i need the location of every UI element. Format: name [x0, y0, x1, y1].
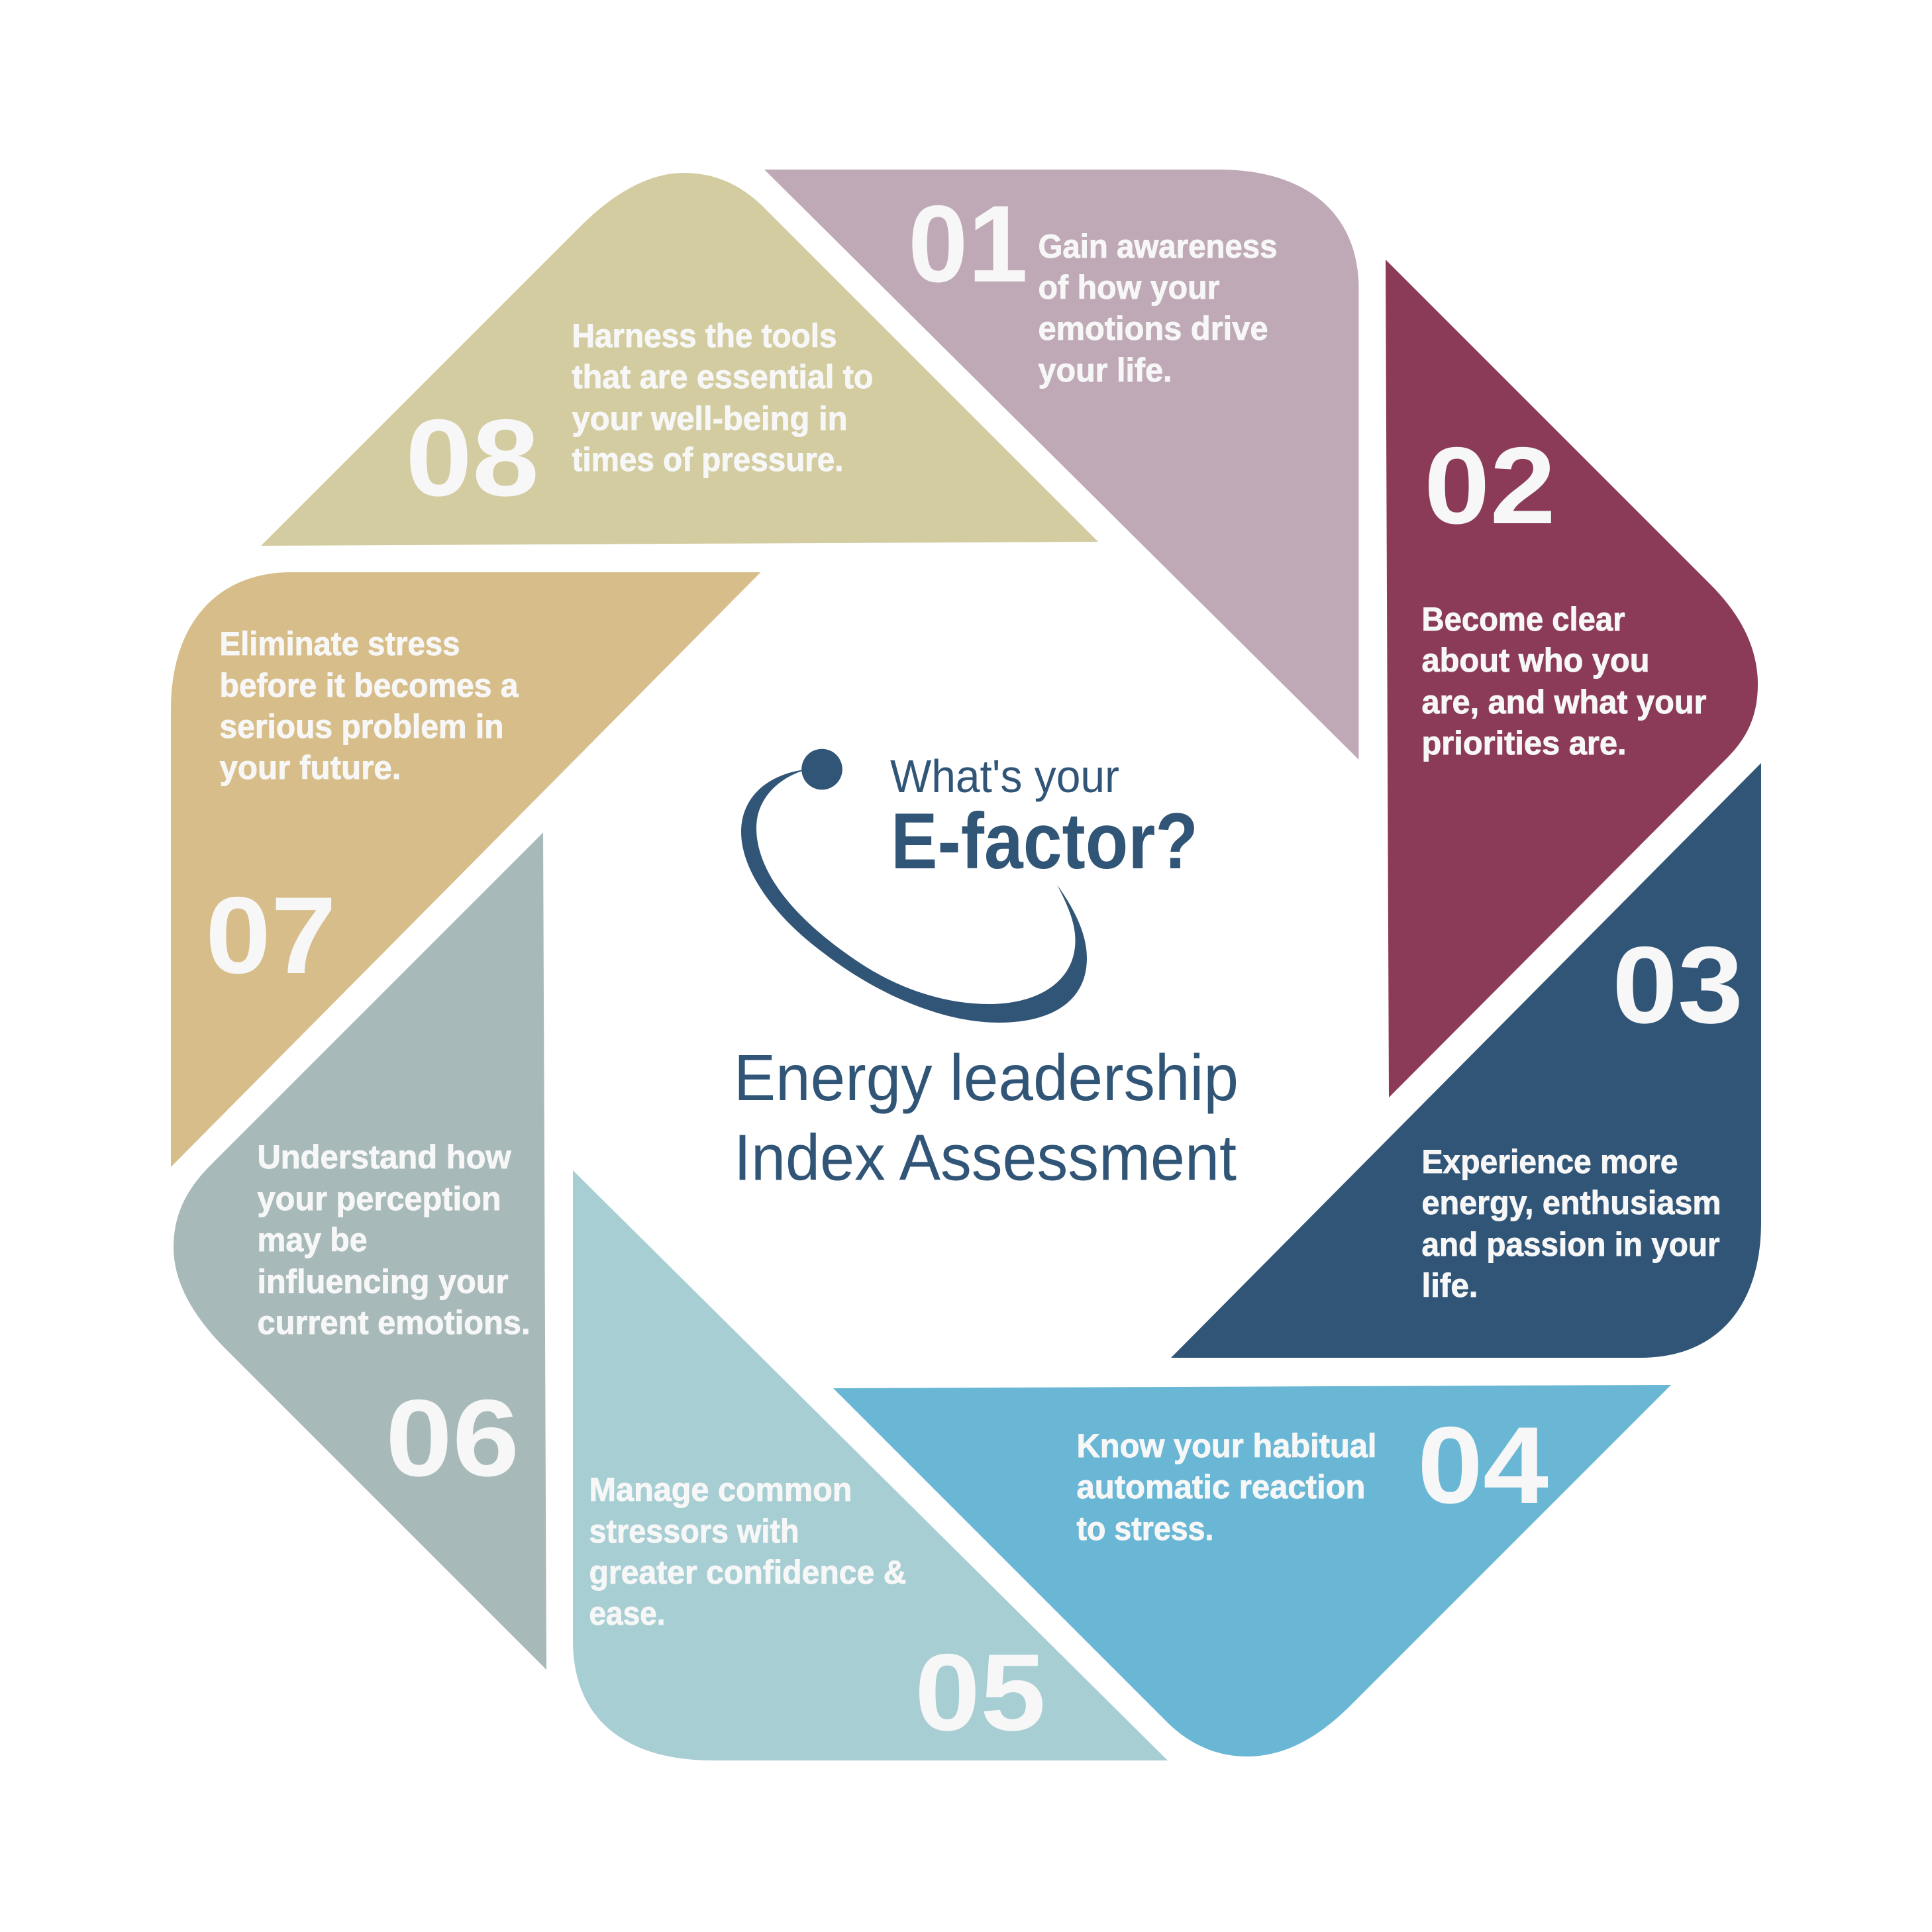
panel 02 text: Become clear — [1421, 601, 1625, 638]
number 08: 08 — [405, 397, 539, 519]
panel 04 shape — [833, 1385, 1671, 1756]
panel 02 text: priorities are. — [1421, 725, 1627, 762]
logo orbit swoosh — [741, 770, 1087, 1023]
number 07: 07 — [205, 874, 336, 996]
panel 08 text: Harness the tools — [572, 317, 837, 354]
panel 05 shape — [573, 1170, 1168, 1760]
panel 05 text — [589, 1471, 906, 1632]
panel 06 text: Understand how — [257, 1139, 511, 1176]
panel 03 text: energy, enthusiasm — [1421, 1184, 1721, 1221]
panel 04 text — [1077, 1427, 1376, 1547]
panel 05 text: stressors with — [589, 1513, 799, 1550]
panel 08 text — [572, 317, 873, 478]
panel 06 text: may be — [257, 1221, 367, 1258]
logo text: E-factor?: E-factor? — [891, 797, 1198, 886]
center title — [734, 1041, 1239, 1194]
panel 07 text: your future. — [220, 749, 401, 786]
panel 07 shape — [171, 572, 760, 1167]
panel 07 text: before it becomes a — [220, 667, 519, 704]
panel 01: emotional awareness — [764, 170, 1359, 760]
panel 04 text: Know your habitual — [1077, 1427, 1376, 1464]
center title: Index Assessment — [734, 1121, 1237, 1194]
panel 04: automatic reaction to stress — [833, 1385, 1671, 1756]
panel 05 text: Manage common — [589, 1471, 852, 1508]
panel 02 text: are, and what your — [1421, 684, 1706, 721]
panel 03 text — [1421, 1143, 1721, 1304]
panel 03: energy and passion — [1171, 763, 1761, 1358]
panel 01 text: Gain awareness — [1039, 228, 1277, 265]
panel 07: eliminating stress — [171, 572, 760, 1167]
panel 08 text: times of pressure. — [572, 441, 844, 478]
panel 05: managing stressors — [573, 1170, 1168, 1760]
panel 08: tools for well-being — [261, 173, 1098, 546]
panel 01 text: emotions drive — [1039, 310, 1268, 347]
panel 02: clarity and priorities — [1386, 260, 1758, 1097]
panel 07 text — [220, 625, 519, 786]
panel 05 text: greater confidence & — [589, 1554, 906, 1591]
panel 03 text: life. — [1421, 1267, 1478, 1304]
number 05: 05 — [915, 1631, 1046, 1753]
panel 06 shape — [174, 833, 546, 1670]
panel 07 text: Eliminate stress — [220, 625, 460, 662]
panel 03 text: and passion in your — [1421, 1226, 1719, 1263]
number 06: 06 — [385, 1377, 519, 1499]
panel 06 text: influencing your — [257, 1263, 509, 1300]
panel 01 text: your life. — [1039, 352, 1172, 389]
center logo: E-factor orbit — [741, 749, 1198, 1023]
panel 02 text — [1421, 601, 1706, 762]
number 02: 02 — [1424, 425, 1556, 546]
logo dot — [801, 749, 842, 789]
panel 05 text: ease. — [589, 1595, 665, 1632]
panel 07 text: serious problem in — [220, 708, 503, 745]
panel 06 text: your perception — [257, 1180, 501, 1217]
panel 06: perception and emotions — [174, 833, 546, 1670]
panel 01 shape — [764, 170, 1359, 760]
center title: Energy leadership — [734, 1041, 1239, 1114]
panel 02 text: about who you — [1421, 642, 1649, 679]
logo text: What's your: What's your — [890, 750, 1119, 802]
panel 04 text: to stress. — [1077, 1510, 1213, 1547]
number 03: 03 — [1612, 924, 1743, 1046]
panel 01 text: of how your — [1039, 269, 1220, 306]
panel 06 text — [257, 1139, 530, 1341]
panel 08 text: that are essential to — [572, 358, 873, 395]
panel 03 text: Experience more — [1421, 1143, 1678, 1180]
number 04: 04 — [1417, 1404, 1549, 1526]
number 01: 01 — [908, 183, 1028, 305]
panel 08 shape — [261, 173, 1098, 546]
panel 01 text — [1039, 228, 1277, 389]
panel 08 text: your well-being in — [572, 400, 848, 437]
panel 02 shape — [1386, 260, 1758, 1097]
panel 06 text: current emotions. — [257, 1304, 530, 1341]
panel 04 text: automatic reaction — [1077, 1468, 1366, 1505]
panel 03 shape — [1171, 763, 1761, 1358]
